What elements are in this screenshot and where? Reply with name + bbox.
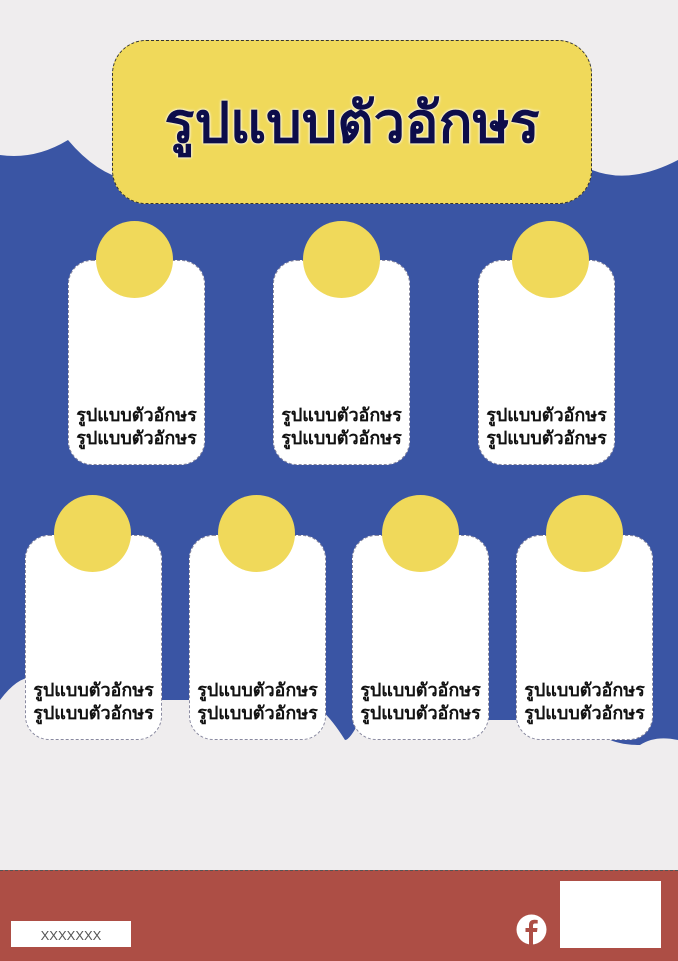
icon: facebook: [516, 914, 546, 944]
card 4: รูปแบบตัวอักษร: [33, 703, 154, 723]
card 7: รูปแบบตัวอักษร: [524, 703, 645, 723]
title box: [112, 40, 592, 204]
card 2: รูปแบบตัวอักษร: [281, 405, 402, 425]
card 2: [273, 260, 410, 465]
circle 5: [218, 495, 295, 572]
card 1: รูปแบบตัวอักษร: [76, 405, 197, 425]
card 5: รูปแบบตัวอักษร: [197, 703, 318, 723]
card 4: [25, 535, 162, 740]
circle 7: [546, 495, 623, 572]
card 3: [478, 260, 615, 465]
footer label box: [11, 921, 131, 947]
card 3: รูปแบบตัวอักษร: [486, 405, 607, 425]
footer: [0, 870, 678, 961]
circle 2: [303, 221, 380, 298]
card 6: รูปแบบตัวอักษร: [360, 703, 481, 723]
circle 1: [96, 221, 173, 298]
title: รูปแบบตัวอักษร: [164, 90, 540, 154]
circle 3: [512, 221, 589, 298]
card 5: [189, 535, 326, 740]
footer label box: XXXXXXX: [41, 928, 101, 943]
circle 4: [54, 495, 131, 572]
card 2: รูปแบบตัวอักษร: [281, 428, 402, 448]
footer image placeholder: [560, 881, 661, 948]
card 6: รูปแบบตัวอักษร: [360, 680, 481, 700]
card 7: รูปแบบตัวอักษร: [524, 680, 645, 700]
card 6: [352, 535, 489, 740]
card 4: รูปแบบตัวอักษร: [33, 680, 154, 700]
card 5: รูปแบบตัวอักษร: [197, 680, 318, 700]
circle 6: [382, 495, 459, 572]
card 3: รูปแบบตัวอักษร: [486, 428, 607, 448]
card 7: [516, 535, 653, 740]
card 1: [68, 260, 205, 465]
card 1: รูปแบบตัวอักษร: [76, 428, 197, 448]
